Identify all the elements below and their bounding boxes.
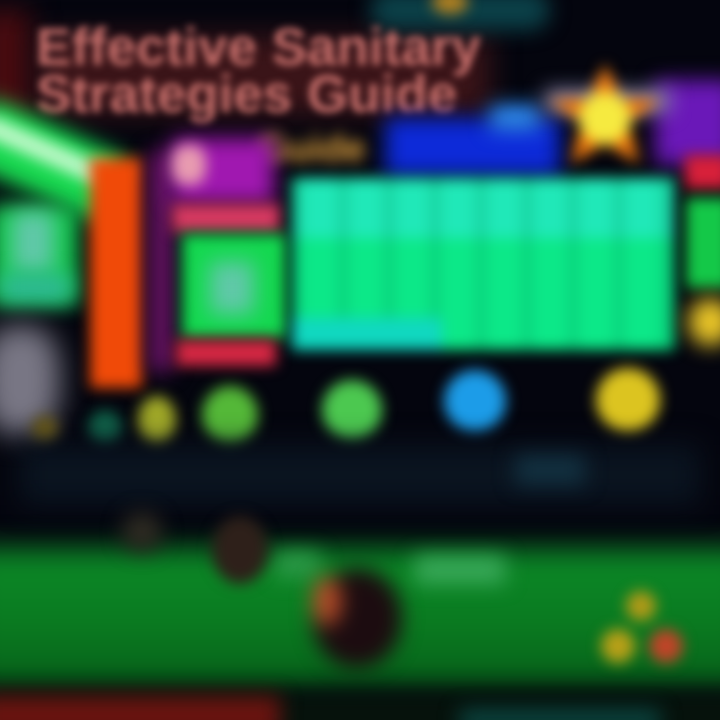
neon green banner — [0, 98, 128, 222]
pink spot — [172, 145, 206, 185]
left panel teal center — [12, 212, 54, 272]
decorative top teal glow — [370, 0, 550, 30]
panel: red-pink band — [172, 204, 280, 232]
dim text blob — [515, 455, 585, 485]
left green panel — [0, 205, 78, 305]
icon: yellow circle — [596, 368, 660, 432]
panel: red footer — [176, 340, 276, 366]
icon: triangle of dots — [592, 582, 693, 673]
icon: star — [545, 58, 664, 170]
panel: main teal table — [292, 178, 674, 350]
panel: top pink and purple block — [172, 138, 274, 204]
table upper light band — [292, 178, 674, 238]
red strip right — [685, 155, 720, 189]
panel: green block — [182, 234, 286, 338]
right green block — [686, 198, 720, 288]
icon: light green circle — [322, 380, 382, 440]
purple column — [150, 150, 172, 372]
subtitle badge: Guide — [258, 128, 366, 170]
large ball — [312, 568, 402, 668]
top yellow spot — [432, 0, 468, 14]
blue band — [385, 118, 560, 176]
orange column — [90, 158, 142, 388]
bottom dark band — [0, 692, 720, 720]
background: dark red corner — [0, 10, 30, 140]
purple panel right — [655, 80, 720, 165]
green block teal centre — [210, 262, 254, 314]
icon: yellow-green circle — [138, 396, 176, 444]
gray blob — [0, 325, 60, 435]
title: Effective Sanitary — [36, 18, 481, 77]
title backdrop glow — [40, 35, 490, 115]
bottom teal strip — [460, 710, 660, 720]
orange ball edge — [312, 576, 342, 626]
title: Strategies Guide — [36, 65, 457, 124]
panel: green floor — [0, 548, 720, 688]
icon: small orange dot — [32, 416, 58, 442]
left panel lower cyan — [0, 275, 70, 301]
right yellow spot — [688, 298, 720, 346]
pale star halo — [545, 90, 670, 112]
icon: blue circle — [444, 370, 506, 432]
table lower teal edge — [292, 318, 442, 350]
floor label — [415, 556, 505, 584]
floor left label — [275, 552, 320, 577]
bottom red strip — [0, 696, 280, 720]
dim text row — [20, 445, 700, 505]
small ball — [122, 512, 162, 552]
table column stripes — [292, 178, 674, 350]
neon banner highlight — [0, 115, 109, 187]
icon: green circle — [202, 386, 258, 444]
light blue highlight — [490, 105, 540, 130]
title — [34, 18, 485, 129]
icon: small teal dot — [88, 410, 122, 444]
medium ball — [212, 516, 268, 584]
